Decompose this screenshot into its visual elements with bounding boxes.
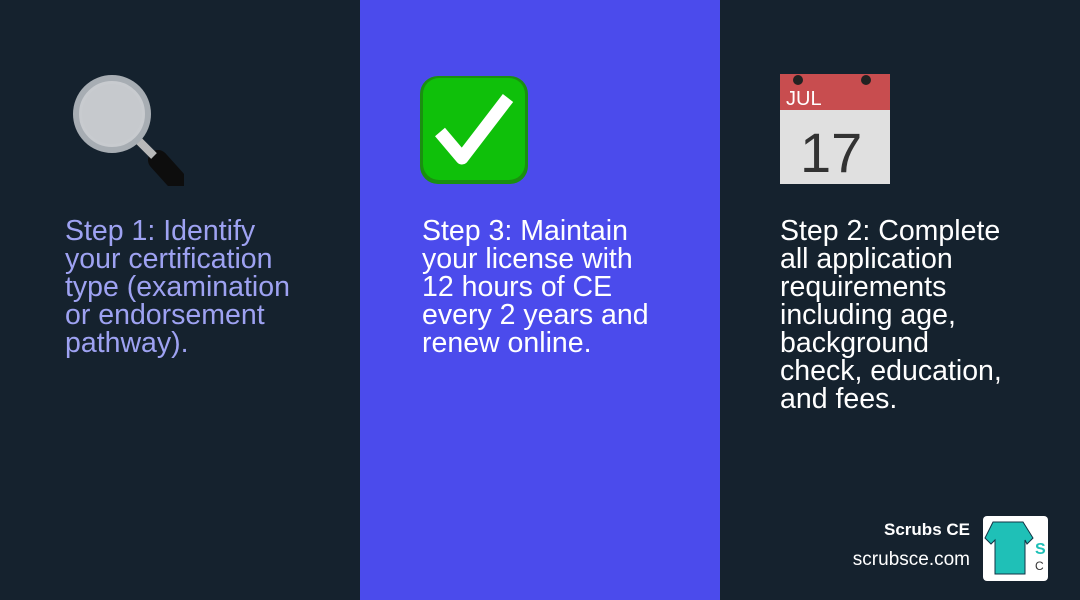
text: step 2: background (780, 327, 929, 359)
icon: calendar: JUL (786, 88, 822, 110)
text: step 3: your license with (422, 243, 633, 275)
text: step 3: renew online. (422, 327, 592, 359)
text: step 2: requirements (780, 271, 946, 303)
text: step 1: Step 1: Identify (65, 215, 255, 247)
panel: step 1 (0, 0, 360, 600)
text: step 2: Step 2: Complete (780, 215, 1000, 247)
panel: step 3 (360, 0, 720, 600)
text: step 2: including age, (780, 299, 956, 331)
text: step 1: or endorsement (65, 299, 265, 331)
brand: Scrubs CE: Scrubs CE (884, 520, 970, 539)
icon: logo: C (1035, 559, 1044, 573)
text: step 3 (422, 215, 649, 359)
text: step 1: type (examination (65, 271, 290, 303)
icon: calendar (780, 74, 890, 184)
icon: magnifying glass (73, 75, 184, 186)
text: step 1: your certification (65, 243, 273, 275)
text: step 3: Step 3: Maintain (422, 215, 628, 247)
text: step 1 (65, 215, 290, 359)
icon: calendar: 17 (800, 121, 862, 184)
brand: Scrubs CE (853, 520, 970, 570)
text: step 2: and fees. (780, 383, 897, 415)
text: step 2 (780, 215, 1002, 415)
icon: logo (983, 516, 1048, 581)
text: step 1: pathway). (65, 327, 189, 359)
text: step 2: check, education, (780, 355, 1002, 387)
brand: Scrubs CE: scrubsce.com (853, 549, 970, 570)
text: step 3: 12 hours of CE (422, 271, 612, 303)
icon: logo: S (1035, 541, 1046, 558)
panel: step 2 (720, 0, 1080, 600)
text: step 2: all application (780, 243, 953, 275)
icon: check mark (420, 76, 528, 184)
text: step 3: every 2 years and (422, 299, 649, 331)
